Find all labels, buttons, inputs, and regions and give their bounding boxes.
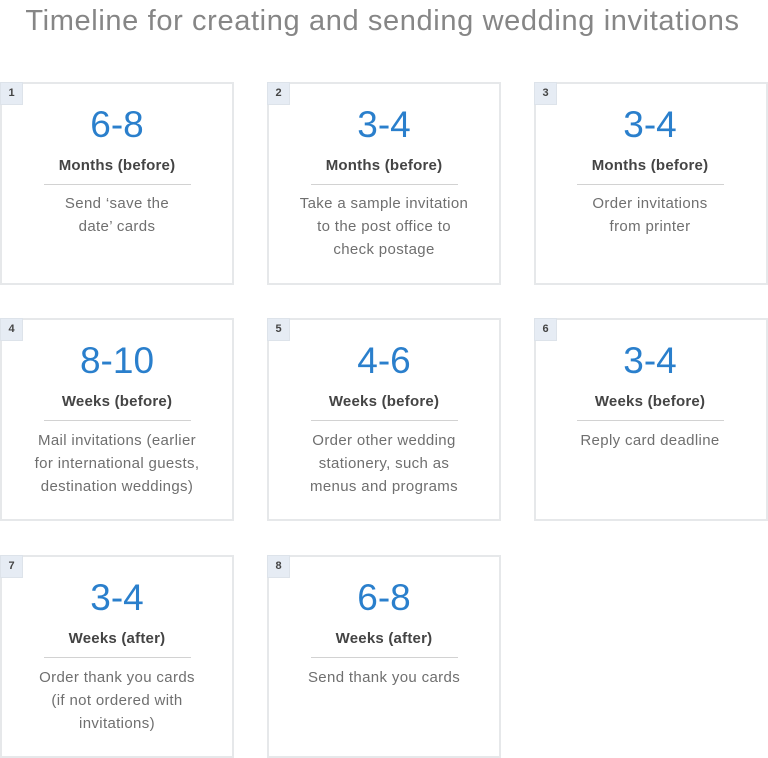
description: save the date: date’ cards — [79, 218, 155, 235]
badge 5: 5 — [275, 323, 282, 335]
description: mail invitations: for international guests, — [35, 455, 199, 472]
badge 8 — [267, 555, 290, 578]
badge 7: 7 — [8, 560, 15, 572]
unit: months before: Months (before) — [326, 156, 442, 174]
description: order invitations — [592, 195, 708, 235]
description: order thank you cards: invitations) — [79, 715, 155, 732]
badge 4 — [0, 318, 23, 341]
unit: weeks before: Weeks (before) — [62, 392, 172, 410]
badge 6 — [534, 318, 557, 341]
time range 3-4: 3-4 — [90, 577, 144, 618]
panel: step 2 — [267, 82, 501, 285]
time range 6-8: 6-8 — [357, 577, 411, 618]
badge 4: 4 — [8, 323, 15, 335]
badge 6: 6 — [542, 323, 549, 335]
description: other stationery: Order other wedding — [312, 432, 456, 449]
panel: step 8 — [267, 555, 501, 758]
time range 3-4: 3-4 — [623, 340, 677, 381]
panel: step 3 — [534, 82, 768, 285]
time range 4-6: 4-6 — [357, 340, 411, 381]
description: order invitations: Order invitations — [592, 195, 708, 212]
description: order thank you cards: Order thank you cards — [39, 669, 195, 686]
title: Timeline for creating and sending wedding invitations — [25, 5, 740, 37]
description: sample invitation: Take a sample invitation — [300, 195, 468, 212]
unit: months before: Months (before) — [592, 156, 708, 174]
time range 8-10: 8-10 — [80, 340, 154, 381]
description: mail invitations: destination weddings) — [41, 478, 193, 495]
panel: step 7 — [0, 555, 234, 758]
badge 1: 1 — [8, 87, 15, 99]
panel: step 1 — [0, 82, 234, 285]
description: sample invitation — [300, 195, 468, 258]
description: order thank you cards — [39, 669, 195, 732]
description: send thank you cards: Send thank you cards — [308, 669, 460, 686]
badge 2 — [267, 82, 290, 105]
time range 6-8: 6-8 — [90, 104, 144, 145]
badge 5 — [267, 318, 290, 341]
description: mail invitations — [34, 432, 199, 495]
description: sample invitation: check postage — [333, 241, 435, 258]
panel: step 6 — [534, 318, 768, 521]
description: save the date — [65, 195, 169, 235]
description: order invitations: from printer — [610, 218, 690, 235]
unit: months before: Months (before) — [59, 156, 175, 174]
badge 3: 3 — [542, 87, 549, 99]
description: save the date: Send ‘save the — [65, 195, 169, 212]
badge 2: 2 — [275, 87, 282, 99]
time range 3-4: 3-4 — [623, 104, 677, 145]
unit: weeks after: Weeks (after) — [69, 630, 165, 646]
badge 3 — [534, 82, 557, 105]
unit: weeks before: Weeks (before) — [595, 392, 705, 410]
description: other stationery: stationery, such as — [319, 455, 449, 472]
description: mail invitations: Mail invitations (earlier — [38, 432, 196, 449]
badge 1 — [0, 82, 23, 105]
unit: weeks after: Weeks (after) — [336, 630, 432, 646]
badge 7 — [0, 555, 23, 578]
description: order thank you cards: (if not ordered with — [51, 692, 183, 709]
badge 8: 8 — [275, 560, 282, 572]
panel: step 5 — [267, 318, 501, 521]
description: other stationery: menus and programs — [310, 478, 458, 495]
description: reply card deadline: Reply card deadline — [580, 432, 720, 449]
description: other stationery — [310, 432, 458, 495]
panel: step 4 — [0, 318, 234, 521]
description: sample invitation: to the post office to — [317, 218, 451, 235]
time range 3-4: 3-4 — [357, 104, 411, 145]
unit: weeks before: Weeks (before) — [329, 392, 439, 410]
